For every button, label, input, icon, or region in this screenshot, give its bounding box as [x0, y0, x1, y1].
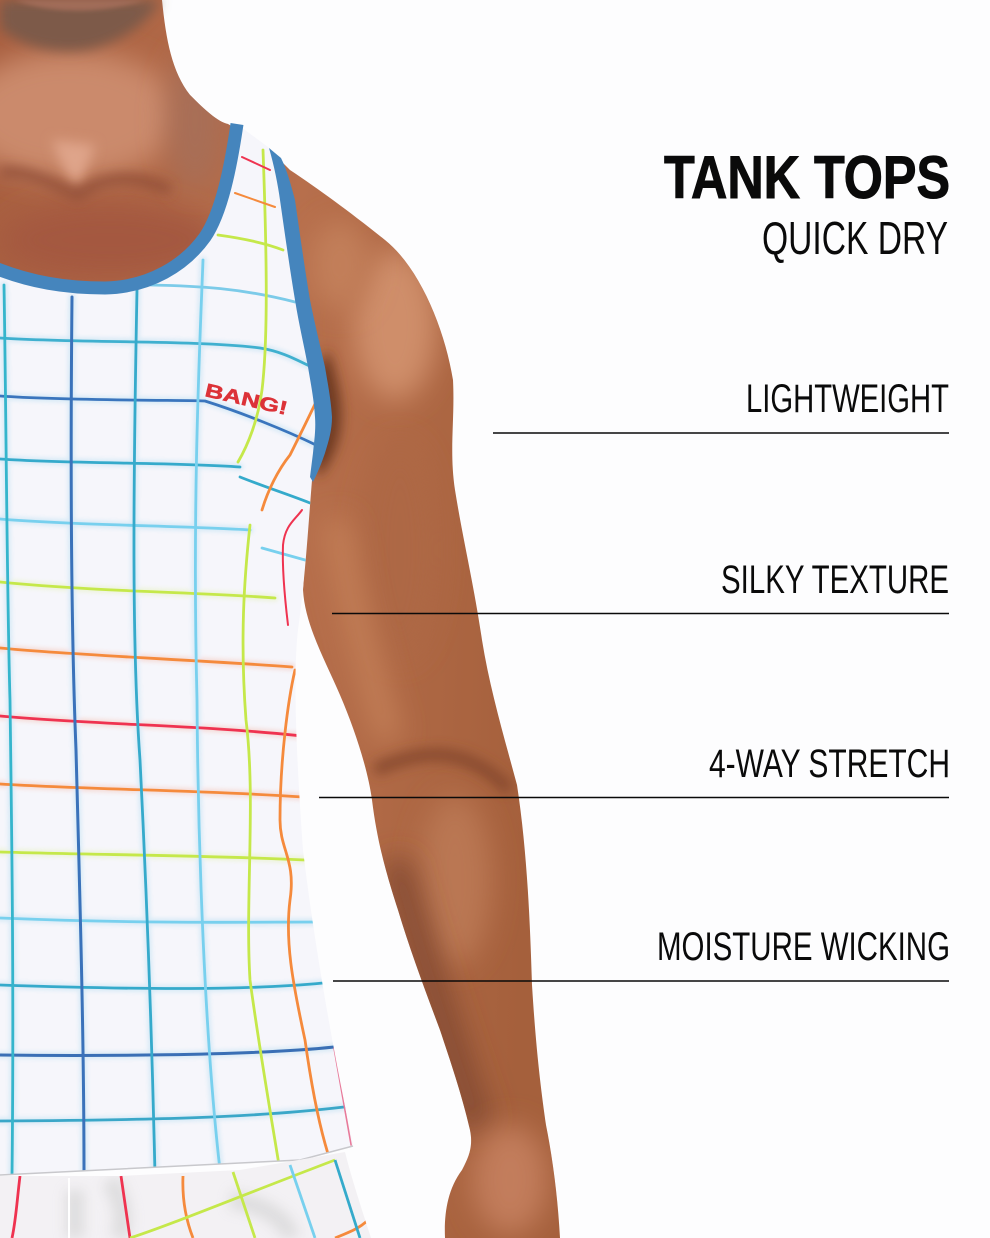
- neck binding: [0, 124, 237, 288]
- grid pattern: [0, 150, 352, 1175]
- armhole binding: [269, 148, 332, 482]
- BANG! logo: BANG!: [203, 380, 289, 420]
- model: skin, neck, arm: [0, 0, 560, 1238]
- shorts: [0, 1152, 371, 1238]
- tank top: [0, 124, 353, 1175]
- beard and lips: [0, 0, 160, 51]
- hem shadow: [0, 1146, 353, 1175]
